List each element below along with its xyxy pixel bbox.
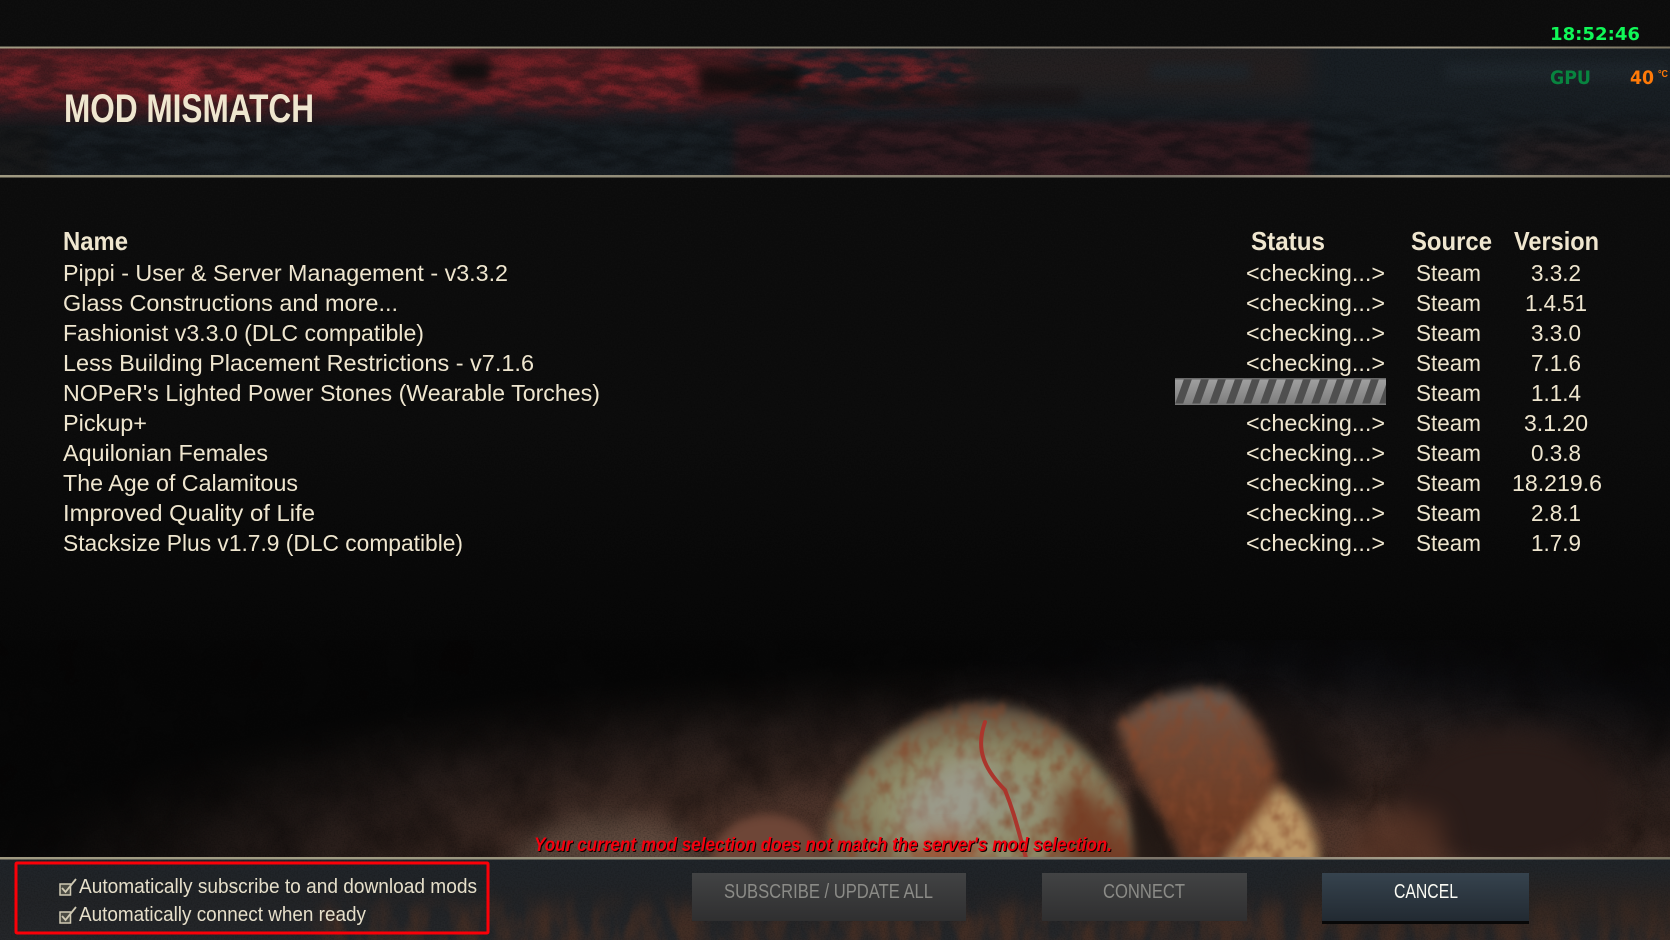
column: version: 1.1.4: [1531, 380, 1581, 406]
column: source: Steam: [1416, 410, 1481, 436]
table header: Status: [1251, 226, 1325, 256]
column: status: <checking...>: [1246, 470, 1385, 496]
footer bar: [0, 857, 1670, 940]
title: MOD MISMATCH: [64, 87, 314, 131]
column: status: <checking...>: [1246, 350, 1385, 376]
GPU temperature readout: [1550, 68, 1668, 89]
column: mod names: Improved Quality of Life: [63, 500, 315, 526]
column: status: <checking...>: [1246, 290, 1385, 316]
column: source: Steam: [1416, 470, 1481, 496]
column: status: <checking...>: [1246, 440, 1385, 466]
table header: Name: [63, 226, 128, 256]
column: version: 2.8.1: [1531, 500, 1581, 526]
warning message: Your current mod selection does not match the server's mod selection.: [534, 834, 1112, 856]
column: mod names: The Age of Calamitous: [63, 470, 298, 496]
column: source: Steam: [1416, 500, 1481, 526]
column: status: <checking...>: [1246, 410, 1385, 436]
option label: connect: Automatically connect when ready: [79, 903, 367, 926]
column: mod names: [63, 260, 600, 556]
column: status: <checking...>: [1246, 320, 1385, 346]
column: version: 18.219.6: [1512, 470, 1602, 496]
GPU temperature readout: °C: [1658, 69, 1668, 80]
button: connect: CONNECT: [1103, 881, 1185, 903]
column: source: Steam: [1416, 440, 1481, 466]
column: status: <checking...>: [1246, 260, 1385, 286]
column: mod names: Pickup+: [63, 410, 147, 436]
checkbox: connect: [60, 907, 76, 923]
column: version: 3.1.20: [1524, 410, 1588, 436]
table header: [63, 226, 1599, 256]
column: mod names: NOPeR's Lighted Power Stones (Wearable Torches): [63, 380, 600, 406]
column: source: Steam: [1416, 530, 1481, 556]
column: source: Steam: [1416, 320, 1481, 346]
button: subscribe / update all: [692, 873, 966, 921]
button: subscribe / update all: SUBSCRIBE / UPDATE ALL: [724, 881, 933, 903]
button: cancel: [1322, 873, 1529, 924]
column: mod names: Stacksize Plus v1.7.9 (DLC compatible): [63, 530, 463, 556]
column: source: Steam: [1416, 260, 1481, 286]
column: version: 7.1.6: [1531, 350, 1581, 376]
progress bar: [1175, 378, 1386, 405]
column: mod names: Glass Constructions and more...: [63, 290, 398, 316]
mod table: [63, 226, 1602, 556]
column: version: 1.4.51: [1525, 290, 1587, 316]
column: status: <checking...>: [1246, 500, 1385, 526]
column: mod names: Fashionist v3.3.0 (DLC compatible): [63, 320, 424, 346]
table header: Version: [1514, 226, 1599, 256]
button: cancel: CANCEL: [1394, 881, 1458, 903]
table header: Source: [1411, 226, 1492, 256]
illustration: bloody eggs: [710, 689, 1620, 880]
column: mod names: Pippi - User & Server Management - v3.3.2: [63, 260, 508, 286]
column: mod names: Aquilonian Females: [63, 440, 268, 466]
checkbox: subscribe: [60, 879, 76, 895]
column: mod names: Less Building Placement Restrictions - v7.1.6: [63, 350, 534, 376]
column: version: 0.3.8: [1531, 440, 1581, 466]
highlight box: auto options: [16, 863, 488, 933]
column: source: Steam: [1416, 290, 1481, 316]
column: source: Steam: [1416, 350, 1481, 376]
column: status: <checking...>: [1246, 530, 1385, 556]
button: connect: [1042, 873, 1247, 921]
option label: subscribe: Automatically subscribe to and download mods: [79, 875, 477, 898]
column: version: 3.3.0: [1531, 320, 1581, 346]
column: version: [1512, 260, 1602, 556]
column: version: 3.3.2: [1531, 260, 1581, 286]
column: source: Steam: [1416, 380, 1481, 406]
column: source: [1416, 260, 1481, 556]
overlay clock: 18:52:46: [1550, 24, 1640, 45]
column: status: [1246, 260, 1385, 556]
header band: [0, 46, 1670, 178]
GPU temperature readout: 40: [1630, 68, 1654, 89]
GPU temperature readout: GPU: [1550, 68, 1591, 89]
column: version: 1.7.9: [1531, 530, 1581, 556]
